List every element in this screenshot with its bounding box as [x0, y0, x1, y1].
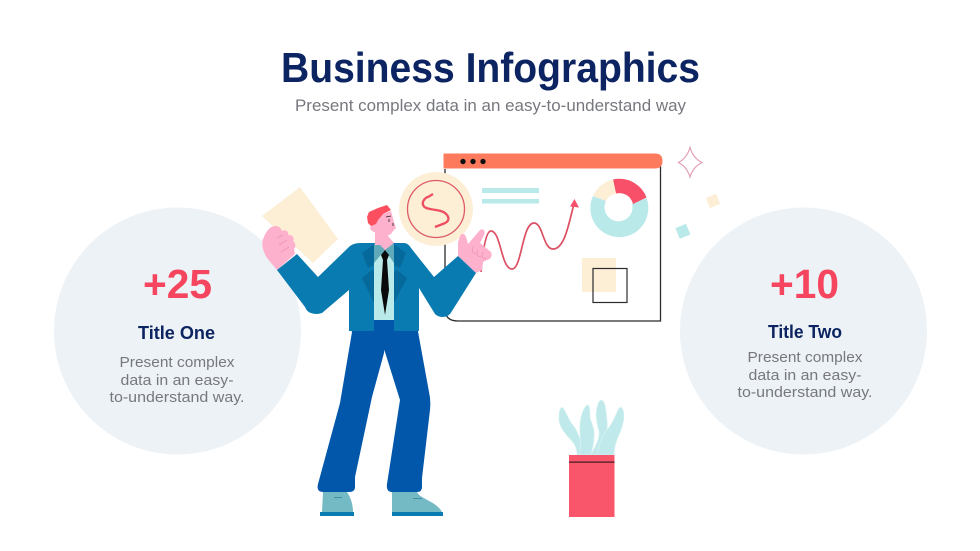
plant — [559, 400, 624, 517]
head — [370, 211, 396, 237]
left number: +25 — [143, 261, 212, 307]
right body text: Present complex — [748, 349, 863, 366]
right body text: to-understand way. — [738, 384, 872, 401]
left body text: to-understand way. — [110, 389, 244, 406]
panel: left stat — [54, 208, 301, 454]
dollar sign — [423, 194, 448, 227]
left body text: Present complex — [120, 354, 235, 371]
left body text — [110, 354, 244, 406]
person — [262, 205, 492, 516]
tie — [381, 250, 389, 315]
left heading: Title One — [138, 323, 215, 343]
leaves — [559, 400, 624, 455]
right trouser leg — [375, 326, 430, 492]
lapels — [362, 244, 407, 303]
waistband — [374, 320, 394, 331]
left shoe — [320, 492, 354, 516]
right number: +10 — [770, 261, 839, 307]
pot — [569, 455, 614, 517]
paper held in hand — [262, 187, 338, 263]
shirt — [374, 250, 394, 320]
outlined square — [593, 268, 627, 302]
icon: cream diamond — [706, 194, 720, 208]
right hand — [458, 229, 492, 273]
right shoe — [392, 492, 443, 516]
cream square — [582, 258, 616, 292]
collar — [374, 244, 394, 263]
trend line with arrow — [481, 199, 579, 272]
icon: sparkle — [678, 148, 702, 177]
icon: teal diamond — [675, 224, 690, 239]
left circle — [54, 208, 301, 454]
left hand — [262, 226, 295, 270]
title: Business Infographics — [281, 44, 700, 91]
window frame — [445, 165, 660, 321]
right circle — [680, 208, 927, 454]
right body text: data in an easy- — [748, 367, 862, 384]
left trouser leg — [318, 326, 386, 492]
subtitle: Present complex data in an easy-to-understand way — [295, 97, 687, 115]
hair — [367, 205, 391, 226]
icon: dollar coin — [399, 172, 473, 246]
panel: right stat — [680, 208, 927, 454]
neck — [375, 228, 394, 250]
donut chart — [590, 179, 648, 237]
jacket — [277, 243, 476, 331]
window title bar — [444, 154, 662, 168]
window dots — [460, 159, 486, 164]
text lines — [482, 188, 539, 204]
right heading: Title Two — [768, 322, 842, 342]
browser window chart — [444, 154, 662, 321]
left body text: data in an easy- — [120, 372, 234, 389]
pot rim line — [569, 462, 614, 463]
right body text — [738, 349, 872, 401]
